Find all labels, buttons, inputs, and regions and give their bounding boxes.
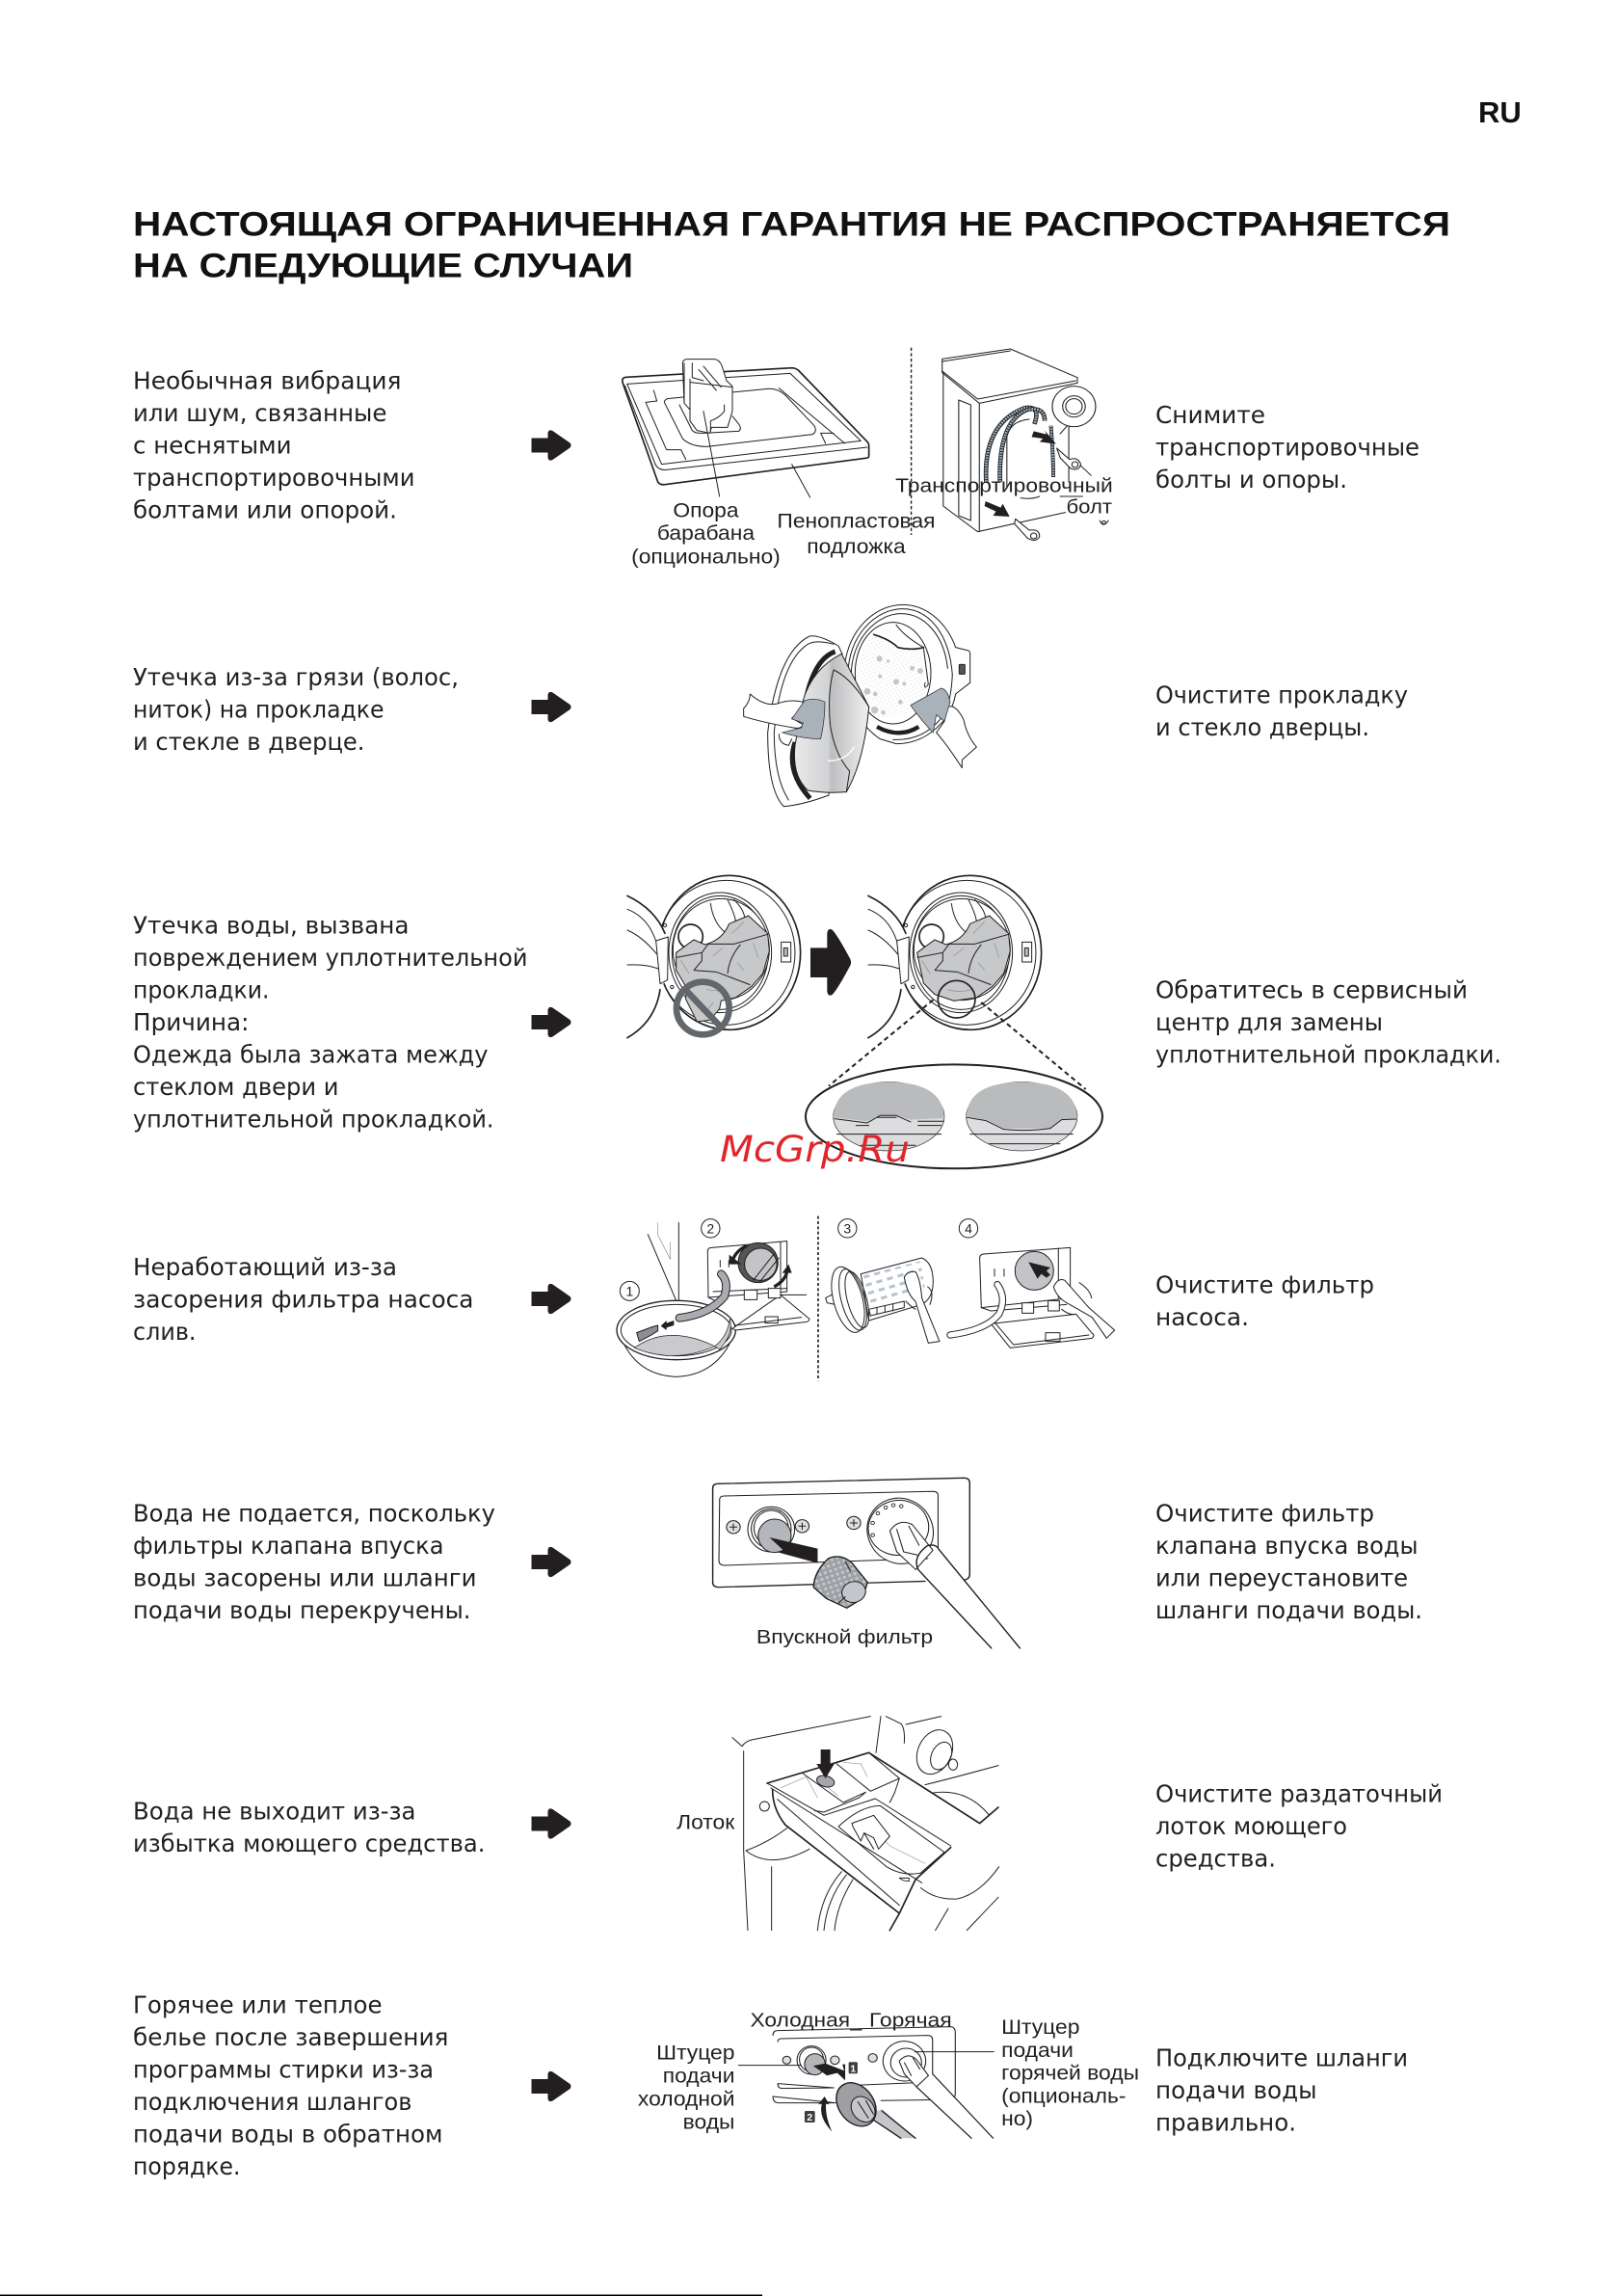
gasket closeup oval — [806, 1064, 1102, 1168]
row 5 remedy text: Очистите фильтр — [1155, 1500, 1374, 1528]
row 7 remedy text — [1155, 2043, 1408, 2136]
row 2 cause text — [133, 663, 459, 756]
row 5 remedy text: шланги подачи воды. — [1155, 1596, 1422, 1624]
mounting plate — [713, 1478, 969, 1588]
foam base label — [777, 509, 936, 558]
foam base label: Пенопластовая — [777, 509, 936, 532]
row 6 remedy text: лоток моющего — [1155, 1812, 1347, 1840]
hot inlet label: (опциональ- — [1001, 2084, 1126, 2107]
row 5 remedy text — [1155, 1500, 1422, 1624]
row 3 arrow — [532, 1007, 570, 1037]
row 5 cause text: Вода не подается, поскольку — [133, 1500, 495, 1528]
row 5 illustration: inlet filter — [713, 1478, 1020, 1648]
hot inlet label: горячей воды — [1001, 2061, 1139, 2084]
row 3 illustration: door gasket damage — [627, 875, 1102, 1168]
cold inlet label: воды — [683, 2110, 734, 2133]
row 7 remedy text: правильно. — [1155, 2108, 1296, 2136]
cold inlet label: холодной — [638, 2087, 734, 2110]
cold hot labels: Горячая — [869, 2010, 952, 2031]
step 2: filter cap: 2 — [706, 1220, 714, 1236]
transit bolt label — [895, 474, 1113, 518]
cold hot labels: Холодная — [751, 2010, 850, 2031]
hot hose — [916, 2074, 994, 2138]
row 4 remedy text — [1155, 1270, 1374, 1331]
row 3 remedy text: центр для замены — [1155, 1008, 1383, 1036]
hot inlet label: Штуцер — [1001, 2016, 1079, 2039]
step 2: filter cap — [679, 1219, 809, 1330]
row 2 remedy text — [1155, 681, 1408, 741]
row 1 remedy text — [1155, 401, 1419, 494]
row 5 arrow — [532, 1547, 570, 1577]
large arrow between states — [810, 929, 851, 996]
hot inlet label: подачи — [1001, 2039, 1074, 2062]
row 2 cause text: и стекле в дверце. — [133, 728, 364, 756]
row 3 cause text: прокладки. — [133, 975, 270, 1003]
row 1 remedy text: болты и опоры. — [1155, 466, 1347, 494]
hose connection diagram: 1 — [850, 2065, 856, 2074]
cold inlet label: Штуцер — [656, 2041, 734, 2064]
row 3 remedy text — [1155, 975, 1501, 1068]
row 3 remedy text: уплотнительной прокладки. — [1155, 1040, 1501, 1068]
row 6 illustration: detergent tray — [732, 1717, 999, 1931]
row 3 cause text — [133, 912, 528, 1133]
row 1 cause text: с неснятыми — [133, 432, 291, 459]
hot inlet label — [1001, 2016, 1139, 2130]
row 7 cause text: Горячее или теплое — [133, 1991, 382, 2019]
inlet filter label: Впускной фильтр — [756, 1626, 933, 1648]
cold hot labels: _ — [849, 2010, 862, 2031]
row 3 remedy text: Обратитесь в сервисный — [1155, 975, 1468, 1003]
inlet port — [748, 1507, 795, 1553]
machine door ring — [844, 604, 970, 744]
row 5 remedy text: или переустановите — [1155, 1564, 1408, 1592]
tray label: Лоток — [676, 1810, 735, 1833]
step 1: bowl and drain hose: 1 — [625, 1283, 633, 1298]
cold hose — [867, 2109, 915, 2138]
step 4: reinstall filter: 4 — [965, 1220, 972, 1236]
hose connection diagram: 2 — [807, 2113, 813, 2123]
tray — [767, 1749, 998, 1931]
row 1 cause text: болтами или опорой. — [133, 495, 397, 524]
row 3 cause text: Утечка воды, вызвана — [133, 912, 409, 939]
row 7 cause text: белье после завершения — [133, 2023, 449, 2051]
step 1: bowl and drain hose — [617, 1222, 735, 1376]
row 6 cause text: Вода не выходит из-за — [133, 1798, 416, 1826]
row 3 cause text: стеклом двери и — [133, 1073, 339, 1101]
row 4 cause text — [133, 1253, 474, 1346]
row 2 remedy text: Очистите прокладку — [1155, 681, 1408, 709]
row 3 cause text: уплотнительной прокладкой. — [133, 1105, 493, 1133]
prohibition symbol — [676, 982, 729, 1034]
row 2 cause text: Утечка из-за грязи (волос, — [133, 663, 459, 691]
row 1 cause text: транспортировочными — [133, 464, 414, 492]
transit bolt label: болт — [1067, 495, 1112, 518]
row 4 remedy text: насоса. — [1155, 1303, 1249, 1331]
washing machine back view — [942, 349, 1108, 540]
closeup: bad gasket — [834, 1082, 944, 1151]
row 7 illustration: hose connection — [638, 2010, 1139, 2138]
removal arrow — [769, 1537, 817, 1563]
row 5 cause text — [133, 1500, 495, 1624]
step 3: pump filter: 3 — [843, 1220, 851, 1236]
row 4 cause text: Неработающий из-за — [133, 1253, 397, 1281]
title: НА СЛЕДУЮЩИЕ СЛУЧАИ — [133, 247, 633, 285]
row 2 arrow — [532, 692, 570, 722]
cold hot labels — [751, 2010, 952, 2031]
row 7 cause text: порядке. — [133, 2152, 241, 2180]
row 5 cause text: фильтры клапана впуска — [133, 1532, 443, 1560]
dashed divider — [910, 348, 914, 535]
drum support label: барабана — [657, 521, 756, 545]
left hand with cloth — [744, 694, 825, 745]
row 7 arrow — [532, 2071, 570, 2101]
hose connection diagram — [738, 2027, 994, 2138]
row 7 cause text: программы стирки из-за — [133, 2056, 434, 2084]
hot inlet label: но) — [1001, 2107, 1033, 2130]
language code: RU — [1478, 95, 1522, 129]
row 1 illustration: foam base and transit bolts — [623, 348, 1113, 568]
row 3 cause text: Одежда была зажата между — [133, 1040, 489, 1068]
row 1 cause text: Необычная вибрация — [133, 367, 401, 395]
drum support label: (опционально) — [631, 545, 781, 568]
closeup: good gasket — [967, 1082, 1077, 1151]
vertical dashed divider — [815, 1216, 820, 1381]
row 4 remedy text: Очистите фильтр — [1155, 1270, 1374, 1298]
row 6 remedy text: Очистите раздаточный — [1155, 1779, 1443, 1807]
row 2 illustration: cleaning door gasket and glass — [744, 604, 976, 807]
row 4 illustration: cleaning pump filter — [617, 1216, 1115, 1381]
row 1 cause text — [133, 367, 414, 524]
watermark: McGrp.Ru — [720, 1129, 910, 1170]
bottom edge rule — [0, 2294, 762, 2296]
row 5 cause text: подачи воды перекручены. — [133, 1596, 470, 1624]
row 7 remedy text: Подключите шланги — [1155, 2043, 1408, 2071]
machine body lines — [732, 1717, 999, 1931]
row 1 cause text: или шум, связанные — [133, 399, 387, 427]
row 7 cause text: подачи воды в обратном — [133, 2121, 443, 2148]
row 1 remedy text: Снимите — [1155, 401, 1265, 429]
row 2 remedy text: и стекло дверцы. — [1155, 713, 1369, 741]
row 7 remedy text: подачи воды — [1155, 2076, 1316, 2104]
row 7 cause text — [133, 1991, 449, 2180]
row 7 cause text: подключения шлангов — [133, 2088, 412, 2116]
row 4 cause text: слив. — [133, 1318, 197, 1346]
row 3 cause text: повреждением уплотнительной — [133, 944, 528, 972]
row 6 arrow — [532, 1808, 570, 1839]
drum support label: Опора — [673, 498, 739, 521]
foam base label: подложка — [807, 535, 906, 558]
washer with gasket closeup — [868, 875, 1042, 1038]
zoom guide dashed lines — [829, 1000, 1086, 1089]
row 5 cause text: воды засорены или шланги — [133, 1564, 476, 1592]
row 1 remedy text: транспортировочные — [1155, 434, 1419, 461]
drum support label — [631, 498, 781, 568]
row 2 cause text: ниток) на прокладке — [133, 696, 384, 724]
foam base and drum support — [623, 360, 869, 497]
right hand with cloth — [911, 688, 976, 768]
title — [133, 206, 1450, 285]
row 3 cause text: Причина: — [133, 1008, 249, 1036]
open door with glass dome — [768, 636, 869, 807]
cold inlet label — [638, 2041, 734, 2133]
step 4: reinstall filter — [950, 1219, 1115, 1348]
title: НАСТОЯЩАЯ ОГРАНИЧЕННАЯ ГАРАНТИЯ НЕ РАСПРОСТРАНЯЕТСЯ — [133, 206, 1450, 243]
row 6 cause text — [133, 1798, 486, 1857]
row 4 arrow — [532, 1284, 570, 1314]
cold inlet label: подачи — [663, 2064, 734, 2087]
row 6 cause text: избытка моющего средства. — [133, 1829, 486, 1857]
row 4 cause text: засорения фильтра насоса — [133, 1286, 474, 1313]
step 3: pump filter — [825, 1219, 940, 1343]
row 6 remedy text: средства. — [1155, 1844, 1276, 1872]
transit bolt label: Транспортировочный — [895, 474, 1113, 496]
row 5 remedy text: клапана впуска воды — [1155, 1532, 1419, 1560]
row 6 remedy text — [1155, 1779, 1443, 1872]
washer with trapped clothing — [627, 875, 801, 1038]
hose connector — [858, 1489, 1020, 1648]
row 1 arrow — [532, 430, 570, 461]
inlet filter — [813, 1557, 869, 1608]
